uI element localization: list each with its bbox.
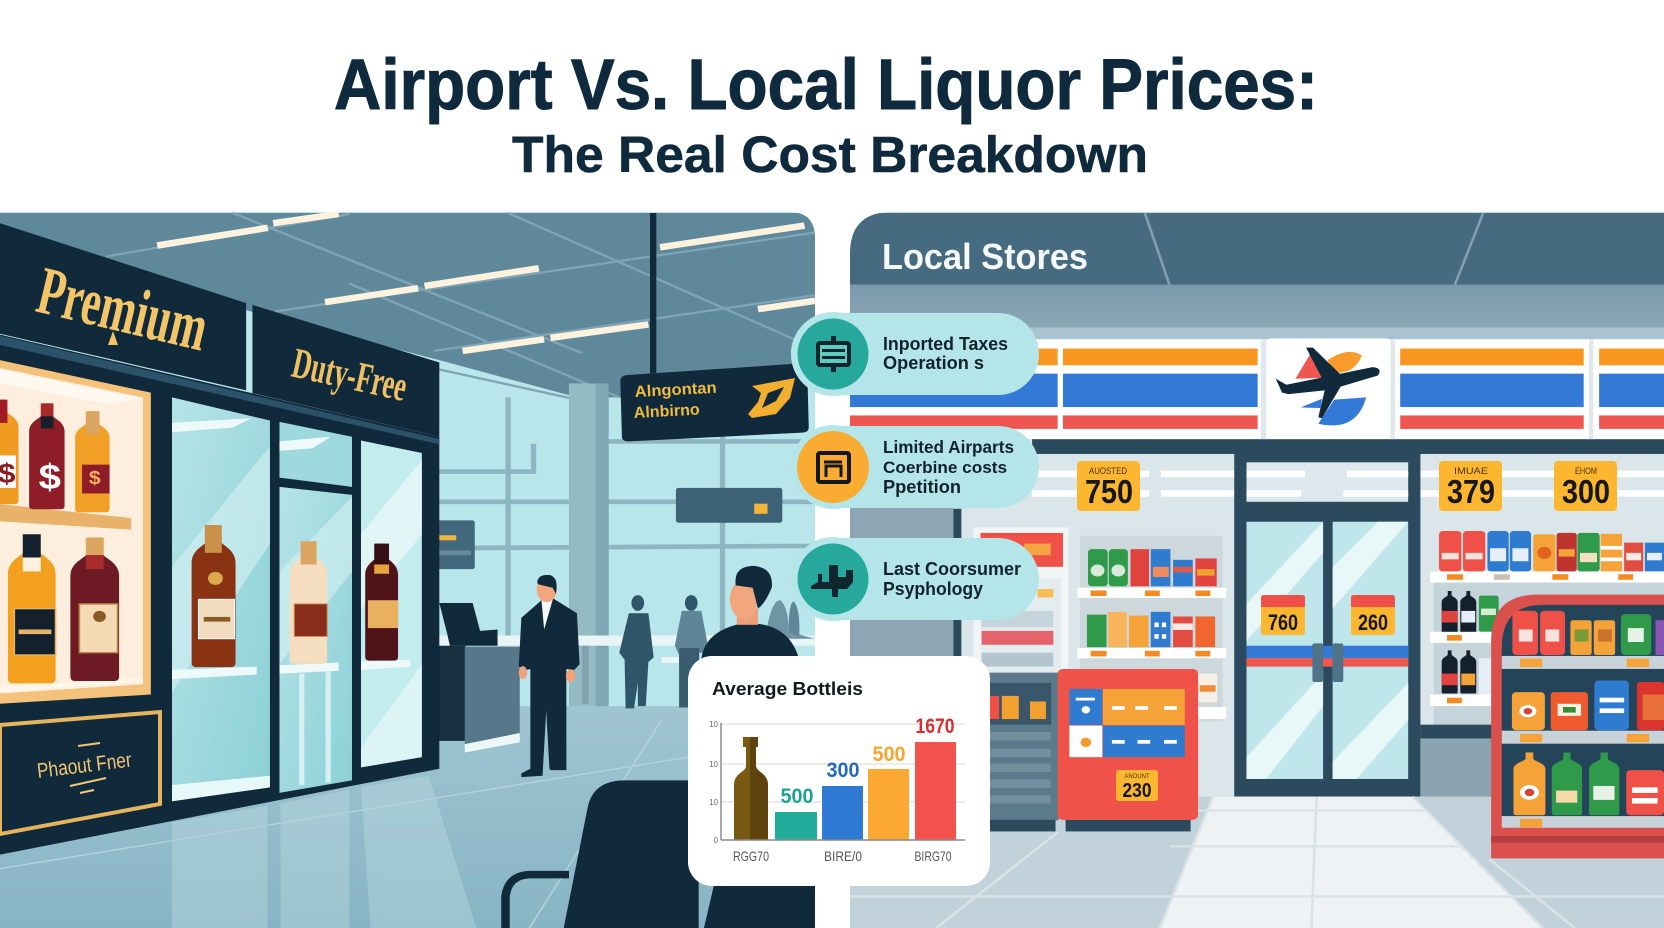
callout: imported taxes pill: Operation s <box>883 353 984 373</box>
bar values: 1670 <box>916 715 954 738</box>
red display cabinet <box>1491 595 1664 858</box>
callout: last consumer pill: Psyphology <box>883 579 983 599</box>
bar chart <box>709 715 965 864</box>
floor tiles <box>830 797 1664 928</box>
bottle: maroon wine <box>70 538 119 681</box>
background windows <box>430 383 815 708</box>
person: foreground head <box>702 566 798 658</box>
bottle: amber whisky <box>8 534 56 683</box>
sign text: Duty-Free: Duty-Free <box>288 340 411 411</box>
storefront sign stripes <box>830 339 1664 439</box>
bottle: amber <box>75 411 110 512</box>
seating <box>505 780 815 928</box>
bottle: orange <box>0 400 19 504</box>
callout: limited airports pill: Limited Airparts <box>883 437 1014 457</box>
bottle: maroon with dollar label: $ <box>39 458 61 497</box>
icon: airplane logo <box>1268 338 1389 426</box>
liquor display window <box>0 360 151 704</box>
left cooler unit <box>974 527 1068 671</box>
x-axis labels: BIRG70 <box>914 848 952 864</box>
bar: red <box>915 742 956 840</box>
glass panes <box>172 397 422 801</box>
sign: Duty-Free band <box>252 305 439 437</box>
bar: orange <box>868 769 909 840</box>
chart title: Average Bottleis <box>712 679 863 699</box>
bar chart: 10 <box>709 720 719 729</box>
bottle: cognac <box>192 525 236 667</box>
bar values: 500 <box>780 785 814 808</box>
x-axis labels: BIRE/0 <box>824 848 862 864</box>
kiosk tag: 230 <box>1116 770 1158 802</box>
hanging sign text: Alngontan <box>634 380 717 401</box>
title: Airport Vs. Local Liquor Prices: Airport Vs. Local Liquor Prices: <box>334 46 1318 125</box>
bar: bottle <box>734 737 768 840</box>
icon: document sign <box>816 336 851 372</box>
panel: airport scene <box>0 200 830 928</box>
icon: gold plane <box>748 378 795 418</box>
hanging pole <box>650 213 656 373</box>
person: traveller in suit <box>519 575 580 777</box>
entrance doors <box>1234 454 1420 797</box>
price tag: 379: IMUAE <box>1454 466 1488 476</box>
bar values <box>780 715 954 808</box>
price tag: 750: AUOSTED <box>1089 466 1127 476</box>
price tag: 379: 379 <box>1447 473 1495 510</box>
hanging sign text <box>633 378 795 422</box>
floor <box>0 706 714 928</box>
vending machine <box>990 673 1191 831</box>
heading: Local Stores: Local Stores <box>882 236 1088 277</box>
icon: storefront box <box>818 453 849 482</box>
sign: Phaout Fner plaque <box>0 712 160 834</box>
subtitle: The Real Cost Breakdown: The Real Cost Breakdown <box>512 126 1148 183</box>
x-axis labels: RGG70 <box>733 848 769 864</box>
x-axis labels <box>733 848 952 864</box>
icon: consumer figure <box>811 565 853 597</box>
bottle: maroon with dollar label <box>29 403 65 509</box>
callout: limited airports pill <box>791 425 1039 509</box>
door tag: 260: 260 <box>1358 610 1388 635</box>
kiosk tag: 230: ANOUNT <box>1124 774 1150 780</box>
door tag: 760: 760 <box>1268 610 1298 635</box>
people in background <box>619 595 815 708</box>
store wall <box>830 439 1664 811</box>
bar: teal <box>775 812 817 840</box>
panel: local store scene <box>830 200 1664 928</box>
callout: imported taxes pill: Inported Taxes <box>883 334 1008 354</box>
chart card: average bottles <box>688 656 990 886</box>
bar: blue <box>822 786 863 840</box>
check-in counter <box>430 603 815 753</box>
callout: limited airports pill: Ppetition <box>883 477 961 497</box>
door tag: 260 <box>1351 595 1395 635</box>
price tag: 300 <box>1554 461 1617 511</box>
callout: imported taxes pill <box>791 312 1039 396</box>
bar chart: 0 <box>714 836 719 845</box>
price tag: 750 <box>1077 461 1140 511</box>
price tag: 300: ЕНОМ <box>1575 466 1597 476</box>
price tag: 300: 300 <box>1562 473 1610 510</box>
bar chart: 10 <box>709 798 719 807</box>
bottle: cream <box>290 541 327 664</box>
red kiosk body <box>1058 669 1198 820</box>
door tag: 760 <box>1261 595 1305 635</box>
bar chart: 10 <box>709 760 719 769</box>
right wall shelves <box>1420 531 1664 797</box>
storefront frame <box>0 335 439 855</box>
callout: last consumer pill <box>791 537 1039 621</box>
bar values: 300 <box>826 759 860 782</box>
bottle: amber: $ <box>89 468 101 489</box>
hanging sign text: Alnbirno <box>633 402 700 422</box>
ceiling <box>0 213 815 400</box>
callout: limited airports pill: Coerbine costs <box>883 458 1007 477</box>
store ceiling <box>830 213 1664 339</box>
sign: Phaout Fner plaque: Phaout Fner <box>36 749 133 783</box>
bar values: 500 <box>872 743 906 766</box>
sign: Premium band <box>0 223 246 390</box>
price tag: 750: 750 <box>1085 473 1133 510</box>
bottle: dark wine <box>365 544 398 661</box>
callout: last consumer pill: Last Coorsumer <box>883 559 1021 579</box>
sign text: Premium: Premium <box>31 252 215 365</box>
price tag: 379 <box>1439 461 1502 511</box>
sign text: Premium <box>35 268 204 351</box>
kiosk tag: 230: 230 <box>1122 780 1152 802</box>
centre shelf unit <box>1077 536 1226 721</box>
